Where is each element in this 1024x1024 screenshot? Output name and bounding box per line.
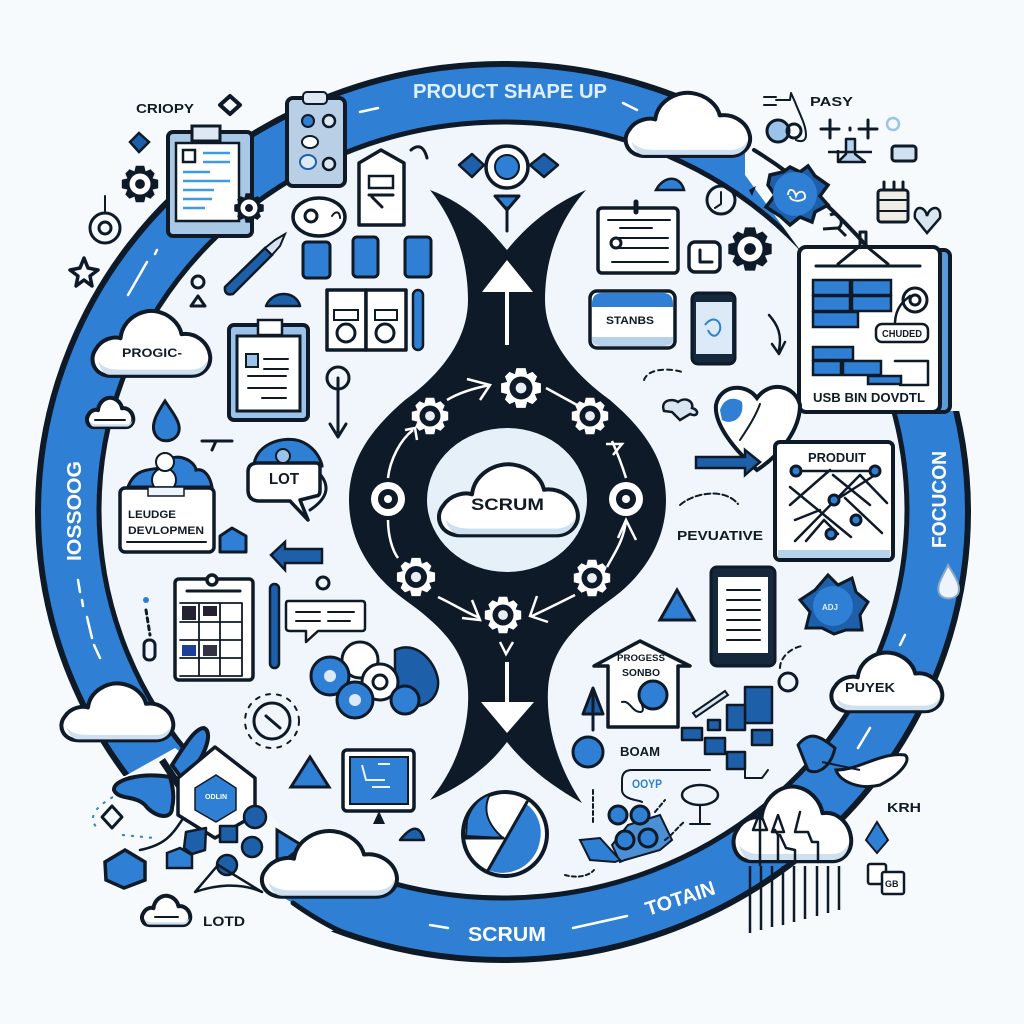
- ring and triangle marker: [191, 276, 205, 306]
- scrum cycle: [371, 368, 643, 633]
- gear ring: [728, 227, 772, 271]
- label: KRH: KRH: [887, 800, 921, 815]
- cloud: PUYEK: PUYEK: [845, 680, 896, 695]
- dashed arc: [644, 370, 682, 380]
- ring label: bottom: SCRUM: [468, 924, 546, 946]
- card: STANBS: [590, 291, 675, 348]
- table: [682, 785, 718, 824]
- double card: [327, 290, 406, 350]
- house: process: [594, 641, 690, 727]
- label: LOTD: LOTD: [203, 913, 245, 929]
- icon: top compass: [459, 146, 558, 231]
- central hourglass: [349, 190, 666, 803]
- hexagon network: ODLIN: [205, 794, 227, 801]
- cloud: PROGIC: PROGIC-: [122, 346, 182, 360]
- icon: switch: [892, 146, 916, 161]
- icon: pen: [225, 234, 285, 294]
- hexagon network: [93, 747, 266, 892]
- ring marker: [317, 577, 329, 589]
- icon: small blue diamond: [130, 133, 149, 152]
- icon: pin: [823, 214, 846, 236]
- pin arrow: [327, 367, 349, 437]
- icons: small blue cards: [303, 237, 431, 278]
- icon: gear top left: [122, 166, 158, 202]
- arrow: right: [696, 450, 760, 475]
- small cloud: LOTD: [142, 896, 190, 925]
- diamond: [866, 822, 888, 853]
- heart small: [915, 208, 940, 233]
- icon: star: [70, 258, 98, 286]
- house: process: SONBO: [622, 668, 660, 679]
- calendar: [175, 575, 253, 680]
- target circle: [245, 694, 299, 748]
- dome: [266, 294, 300, 306]
- cube cluster: [565, 790, 684, 877]
- ring marker: [887, 118, 899, 130]
- big board: USB BIN DOVDTL: [813, 390, 925, 405]
- small cloud: [87, 398, 133, 427]
- callout: OOYP: OOYP: [632, 777, 662, 791]
- ring label: left: IOSSOOG: [64, 461, 86, 561]
- pie chart: [463, 792, 547, 876]
- bar cluster: [682, 687, 772, 778]
- curved arrow: [769, 315, 785, 354]
- dome: [400, 829, 424, 840]
- icon: dome top: [656, 179, 684, 190]
- phone: [692, 293, 735, 364]
- card: knowledge development: LEUDGE: [128, 509, 176, 521]
- card: knowledge development: DEVLOPMEN: [128, 525, 204, 537]
- LOT callout: [248, 439, 326, 520]
- icon: head bubble: [293, 198, 345, 236]
- arrow: up: [482, 260, 533, 345]
- dashed arc: [680, 494, 738, 505]
- overlapping squares: [868, 864, 904, 894]
- cloud with rain: [734, 786, 851, 933]
- blue band stub: [277, 830, 303, 860]
- label: PEVUATIVE: PEVUATIVE: [677, 528, 763, 543]
- top right cloud: [626, 93, 750, 156]
- LOT callout: LOT: [269, 471, 299, 488]
- monitor: [343, 750, 414, 824]
- icon: clock: [707, 186, 735, 214]
- big board: CHUDED: [882, 329, 922, 340]
- center cloud: SCRUM: SCRUM: [471, 495, 544, 514]
- icon: small bird: [749, 186, 756, 196]
- cloud: bottom: [262, 831, 397, 897]
- icon: up arrow person: [573, 688, 603, 767]
- big board: [799, 232, 950, 412]
- dashed pin: [143, 597, 155, 660]
- top-left label: CRIOPY: [136, 101, 194, 116]
- cloud: PROGIC: [93, 311, 210, 376]
- bird: [798, 736, 907, 787]
- icon: tag doc: [359, 147, 427, 225]
- arrow: left: [271, 542, 322, 570]
- card: STANBS: STANBS: [606, 315, 654, 327]
- icon: target: [90, 196, 120, 243]
- blob cluster: [311, 642, 438, 718]
- cloud: PUYEK: [831, 653, 942, 711]
- drop: [153, 401, 179, 441]
- triangle: [291, 757, 329, 787]
- pencil: [413, 290, 423, 350]
- card: knowledge development: [120, 453, 214, 552]
- sparkles: [821, 120, 877, 138]
- butterfly: [114, 728, 208, 816]
- icon: small gear: [234, 193, 264, 223]
- callout: OOYP: [622, 770, 710, 802]
- blue gear right: [800, 575, 868, 634]
- blue gear: [766, 166, 828, 225]
- clipboard middle: [229, 320, 308, 420]
- label: PASY: PASY: [810, 94, 853, 109]
- card: note: [598, 202, 678, 273]
- ring label: top: PROUCT SHAPE UP: [413, 81, 607, 103]
- icon: glasses: [764, 93, 806, 142]
- card: phone list: [287, 92, 345, 186]
- label: BOAM: BOAM: [620, 744, 660, 759]
- card: PRODUIT map: PRODUIT: [808, 450, 866, 465]
- small box: [220, 528, 246, 552]
- tab card: [689, 242, 720, 272]
- icon: stand: [828, 139, 872, 162]
- overlapping squares: GB: [885, 879, 899, 889]
- heart map: [716, 387, 800, 470]
- center cloud: SCRUM: [439, 464, 578, 535]
- speech bubble: [286, 601, 365, 642]
- pen vertical: [270, 584, 279, 668]
- blue gear right: ADJ: [822, 603, 838, 612]
- ring label: right: FOCUCON: [929, 451, 951, 548]
- cloud: bottom left: [61, 683, 173, 740]
- triangle: [660, 590, 694, 620]
- sphere badge: [779, 646, 802, 691]
- drop: [938, 565, 959, 598]
- house: process: PROGESS: [617, 653, 665, 663]
- tablet: [711, 567, 775, 666]
- card: PRODUIT map: [775, 442, 893, 560]
- stack: [878, 182, 908, 222]
- small cloud: [663, 400, 697, 420]
- ring label: bottom right: TOTAIN: [643, 878, 718, 921]
- pin mark: [202, 441, 232, 450]
- clipboard top left: [168, 126, 252, 236]
- arrow: down: [481, 642, 534, 733]
- icon: diamond: [220, 96, 240, 114]
